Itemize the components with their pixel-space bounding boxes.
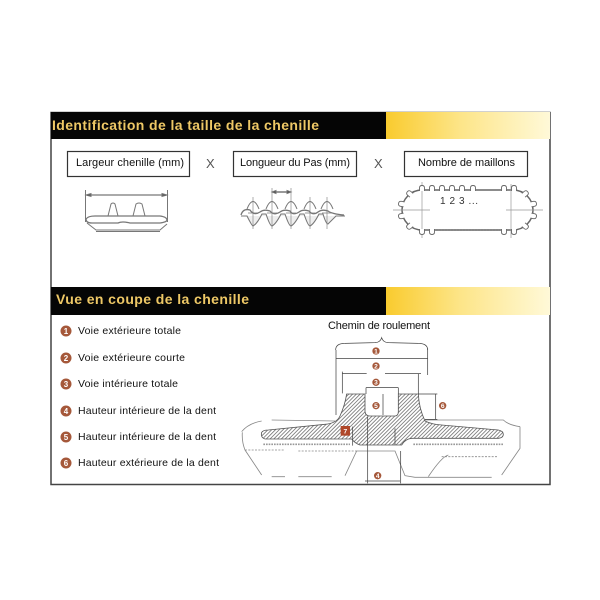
hatched track body bbox=[261, 394, 503, 445]
legend item 2: 2 bbox=[64, 354, 69, 363]
legend item 4: 4 bbox=[64, 407, 69, 416]
legend item 6: 6 bbox=[64, 459, 69, 468]
dimension markers: 5 bbox=[374, 403, 378, 410]
legend item 2: Voie extérieure courte bbox=[78, 352, 185, 364]
diagram: track links bbox=[393, 182, 543, 238]
cross-section diagram bbox=[242, 338, 520, 483]
legend item 1: Voie extérieure totale bbox=[78, 325, 181, 337]
track outline bbox=[242, 420, 520, 477]
legend item 4: Hauteur intérieure de la dent bbox=[78, 405, 216, 417]
dimension markers bbox=[341, 347, 446, 480]
legend item 3: 3 bbox=[64, 380, 69, 389]
box: largeur chenille bbox=[68, 152, 190, 176]
label: chemin de roulement: Chemin de roulement bbox=[328, 320, 430, 332]
diagram: track width bbox=[86, 190, 168, 232]
diagram: track links: 1 2 3 ... bbox=[440, 196, 478, 207]
multiply sign 1: X bbox=[206, 156, 215, 171]
diagram: track pitch bbox=[241, 188, 345, 229]
legend item 5: 5 bbox=[64, 433, 69, 442]
dimension markers: 1 bbox=[374, 348, 378, 355]
box: nombre de maillons: Nombre de maillons bbox=[418, 157, 516, 169]
section header: vue en coupe: Vue en coupe de la chenille bbox=[56, 291, 249, 307]
box: nombre de maillons bbox=[404, 152, 528, 176]
dimension lines bbox=[336, 338, 437, 483]
legend item 6: Hauteur extérieure de la dent bbox=[78, 457, 219, 469]
box: longueur du pas: Longueur du Pas (mm) bbox=[240, 157, 350, 169]
dimension markers: 3 bbox=[374, 380, 378, 387]
dimension markers: 7 bbox=[343, 428, 347, 435]
dimension markers: 2 bbox=[374, 363, 378, 370]
legend item 5: Hauteur intérieure de la dent bbox=[78, 431, 216, 443]
legend item 1: 1 bbox=[64, 327, 69, 336]
dimension markers: 4 bbox=[376, 473, 380, 480]
box: longueur du pas bbox=[234, 152, 356, 176]
section header: identification bbox=[51, 112, 550, 139]
panel frame bbox=[51, 112, 550, 484]
multiply sign 2: X bbox=[374, 156, 383, 171]
section header: vue en coupe bbox=[51, 287, 550, 315]
legend item 3: Voie intérieure totale bbox=[78, 378, 178, 390]
box: largeur chenille: Largeur chenille (mm) bbox=[76, 157, 184, 169]
dimension markers: 6 bbox=[441, 403, 445, 410]
legend list bbox=[60, 325, 219, 469]
section header: identification: Identification de la taille de la chenille bbox=[52, 117, 319, 133]
